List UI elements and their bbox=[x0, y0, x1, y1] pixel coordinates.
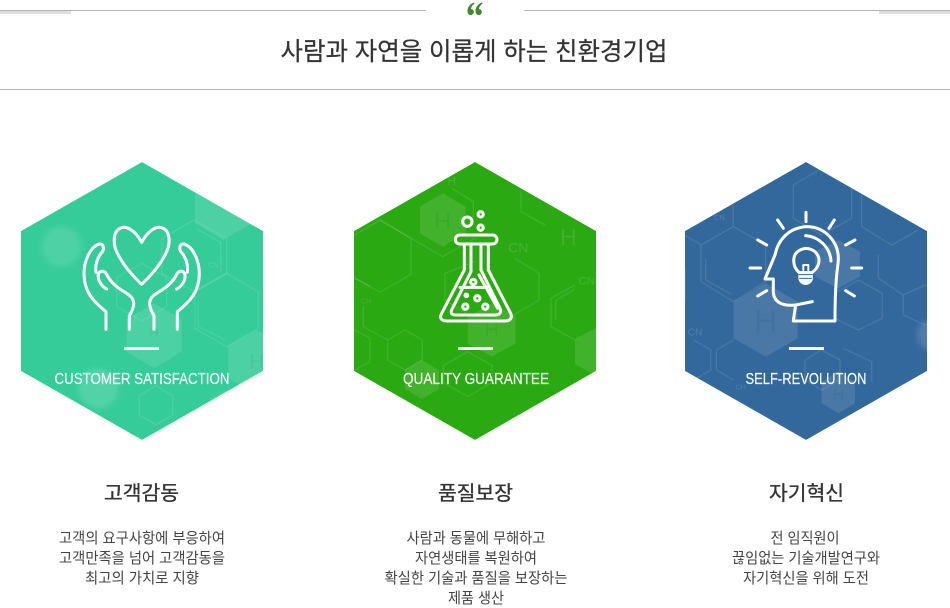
hexagon: quality guarantee: CN bbox=[361, 296, 371, 305]
header rule bbox=[0, 10, 950, 90]
heading: 고객감동: 고객감동 bbox=[104, 482, 179, 505]
hexagon: customer satisfaction: CN bbox=[208, 261, 219, 270]
label: customer satisfaction: CUSTOMER SATISFACTION bbox=[54, 371, 230, 388]
hexagon: customer satisfaction bbox=[21, 162, 285, 440]
text block: 자기혁신 description: 전 임직원이 bbox=[770, 530, 840, 547]
label: self-revolution: SELF-REVOLUTION bbox=[746, 371, 866, 388]
hexagon: customer satisfaction: H bbox=[149, 325, 159, 340]
panel: customer satisfaction bbox=[21, 162, 285, 587]
hexagon: quality guarantee: CN bbox=[578, 275, 595, 287]
text block: 품질보장 description: 자연생태를 복원하여 bbox=[415, 550, 537, 567]
text block: 품질보장 description: 확실한 기술과 품질을 보장하는 bbox=[384, 570, 568, 587]
text block: 자기혁신 description: 끊임없는 기술개발연구와 bbox=[732, 550, 880, 567]
icon: flask bbox=[441, 212, 511, 321]
hexagon: self-revolution: CN bbox=[714, 213, 725, 222]
hexagon: quality guarantee: H bbox=[484, 320, 499, 342]
divider bar bbox=[458, 347, 493, 350]
hexagon: self-revolution: CH bbox=[735, 383, 746, 392]
hexagon: quality guarantee bbox=[354, 162, 596, 440]
text block: 고객감동 description bbox=[59, 530, 225, 587]
heading: 자기혁신: 자기혁신 bbox=[769, 482, 844, 505]
hexagon: quality guarantee: CN bbox=[508, 240, 528, 256]
panel: quality guarantee bbox=[354, 162, 596, 605]
text block: 고객감동 description: 고객의 요구사항에 부응하여 bbox=[59, 530, 225, 547]
hexagon: quality guarantee: H bbox=[447, 174, 456, 188]
hexagon: self-revolution: H bbox=[833, 387, 844, 404]
icon: green quotation mark bbox=[468, 2, 482, 15]
hexagon: customer satisfaction: H bbox=[249, 351, 264, 373]
text block: 품질보장 description bbox=[384, 530, 568, 607]
hexagon: quality guarantee: H bbox=[434, 208, 451, 234]
text block: 고객감동 description: 고객만족을 넘어 고객감동을 bbox=[59, 550, 225, 567]
text block: 품질보장 description: 사람과 동물에 무해하고 bbox=[406, 530, 546, 547]
hexagon: self-revolution: CN bbox=[688, 327, 702, 338]
hexagon: self-revolution: H bbox=[754, 303, 777, 339]
hexagon: self-revolution bbox=[684, 162, 947, 440]
text block: 자기혁신 description: 자기혁신을 위해 도전 bbox=[743, 570, 869, 587]
heading: 품질보장: 품질보장 bbox=[438, 482, 513, 505]
label: quality guarantee: QUALITY GUARANTEE bbox=[403, 371, 549, 388]
divider bar bbox=[124, 347, 159, 350]
icon: hands holding heart bbox=[84, 227, 199, 329]
panel: self-revolution bbox=[684, 162, 947, 587]
text block: 자기혁신 description bbox=[732, 530, 880, 587]
text block: 품질보장 description: 제품 생산 bbox=[448, 590, 504, 607]
divider bar bbox=[789, 347, 824, 350]
text block: 고객감동 description: 최고의 가치로 지향 bbox=[85, 570, 199, 587]
title: 사람과 자연을 이롭게 하는 친환경기업 bbox=[280, 38, 668, 66]
hexagon: quality guarantee: H bbox=[560, 224, 577, 250]
icon: head with lightbulb bbox=[750, 212, 862, 321]
